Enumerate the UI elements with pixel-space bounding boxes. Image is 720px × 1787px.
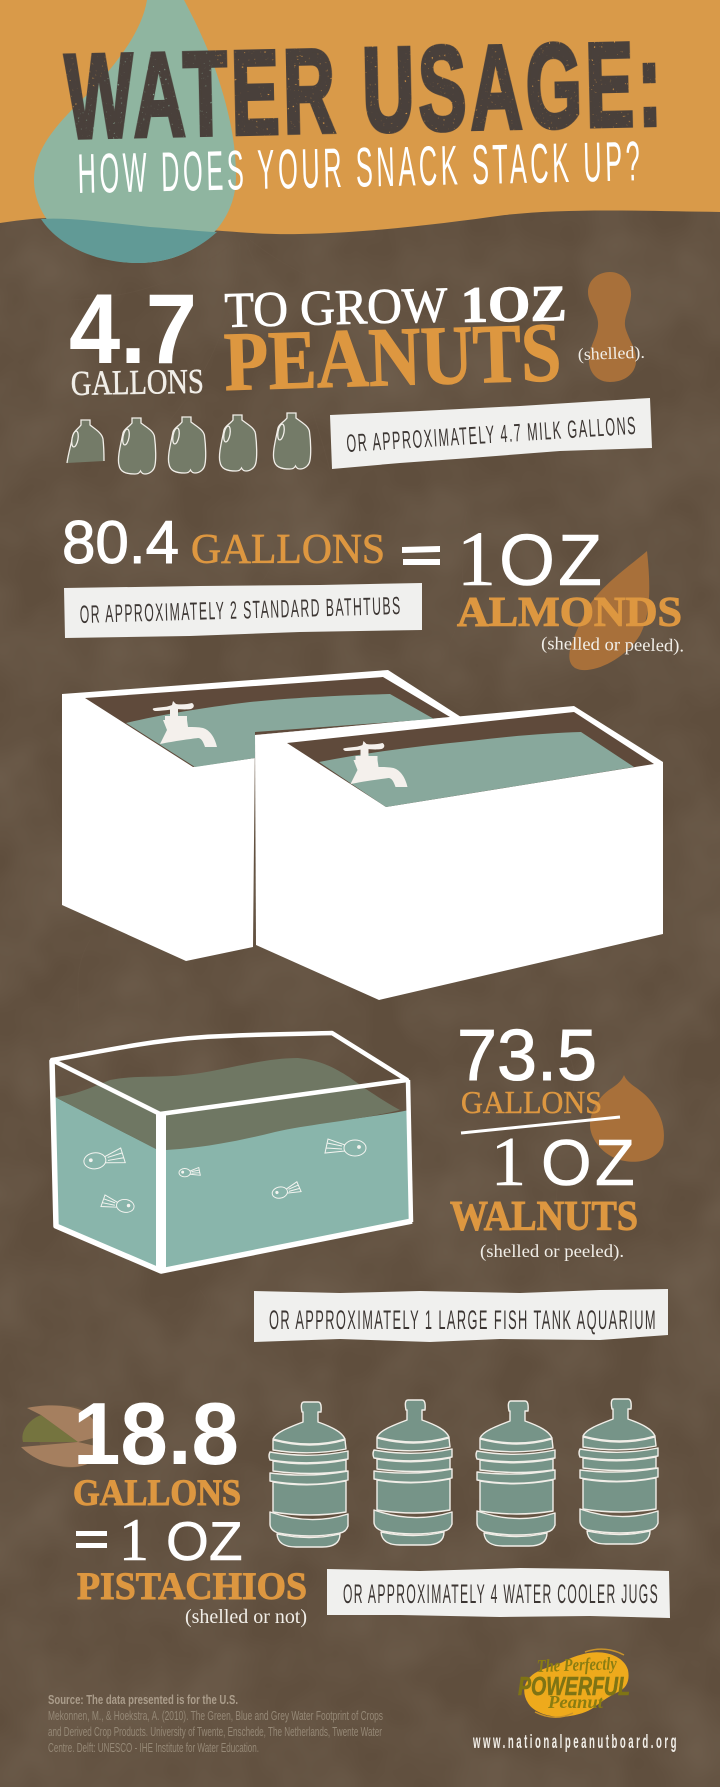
icon: almond [569, 551, 649, 670]
icon: peanut [588, 272, 636, 382]
icon: fish [83, 1148, 126, 1170]
logo: the perfectly powerful peanut: Peanut [547, 1692, 604, 1712]
icon: fish [179, 1167, 200, 1177]
1 oz: 1OZ [460, 276, 567, 334]
panel: pistachios [21, 1384, 670, 1628]
pistachios heading: PISTACHIOS [77, 1565, 307, 1608]
panel: walnuts [52, 1016, 668, 1342]
1 oz: 1 [491, 1124, 526, 1201]
icon: fish [271, 1181, 302, 1200]
icon: fish [325, 1139, 366, 1156]
shelled note: (shelled or peeled). [480, 1241, 624, 1262]
1 oz: 1 [119, 1507, 149, 1573]
source text: Centre. Delft: UNESCO - IHE Institute for Water Education. [48, 1740, 259, 1755]
to grow: TO GROW [224, 276, 449, 338]
water jug [579, 1399, 658, 1544]
1 oz: O [541, 1126, 592, 1199]
callout: aquarium [254, 1289, 668, 1342]
icon: milk jugs [67, 413, 311, 474]
callout: water cooler jugs [327, 1568, 670, 1618]
icon: faucet [343, 741, 408, 787]
source text: Source: The data presented is for the U.S. [48, 1692, 238, 1707]
water jug [476, 1401, 555, 1546]
icon: fish [101, 1195, 135, 1213]
panel: almonds [62, 509, 684, 1000]
shelled note: (shelled or peeled). [541, 633, 684, 656]
bathtub front [255, 706, 663, 1000]
1 oz: O [166, 1510, 209, 1572]
big number 73.5: 73.5 [457, 1016, 597, 1096]
source text [48, 1692, 383, 1755]
icon: walnut [590, 1075, 664, 1162]
icon: pistachio [21, 1405, 101, 1468]
callout: bathtubs [64, 583, 422, 638]
header band [0, 0, 720, 234]
fraction line [461, 1117, 620, 1133]
water jug [269, 1402, 348, 1547]
big number 80.4: 80.4 [62, 509, 179, 576]
water jug [373, 1400, 452, 1545]
shelled note: (shelled). [577, 343, 645, 364]
icon: faucet [153, 701, 217, 747]
milk jug [118, 418, 156, 474]
logo: the perfectly powerful peanut: The Perfectly [536, 1653, 618, 1676]
panel: peanuts [67, 272, 652, 474]
1 oz: 1 [457, 515, 496, 602]
1 oz: Z [595, 1126, 635, 1199]
1 oz: Z [558, 521, 602, 601]
big number 18.8: 18.8 [73, 1384, 239, 1483]
milk jug partial [67, 420, 104, 463]
gallons label: GALLONS [73, 1473, 241, 1514]
1 oz: Z [209, 1510, 243, 1572]
milk jug [168, 417, 206, 473]
source text: Mekonnen, M., & Hoekstra, A. (2010). The Green, Blue and Grey Water Footprint of Crops [48, 1708, 383, 1723]
equals sign [76, 1531, 107, 1548]
icon: water drop [34, 0, 236, 263]
fish tank [52, 1033, 412, 1271]
big number 4.7: 4.7 [69, 273, 197, 384]
milk jug [219, 415, 257, 471]
equals sign [402, 546, 440, 565]
walnuts heading: WALNUTS [450, 1194, 638, 1240]
shelled note: (shelled or not) [185, 1606, 307, 1628]
gallons label: GALLONS [461, 1084, 602, 1120]
gallons label: GALLONS [70, 362, 204, 403]
source text: and Derived Crop Products. University of Twente, Enschede, The Netherlands, Twente Water [48, 1724, 382, 1739]
callout: milk gallons [330, 398, 652, 469]
milk jug [273, 413, 311, 469]
1 oz: O [499, 521, 555, 601]
peanuts heading: PEANUTS [223, 306, 562, 409]
icon: water cooler jugs [269, 1399, 658, 1547]
gallons label: GALLONS [191, 527, 385, 573]
bathtub back [62, 670, 461, 961]
logo: the perfectly powerful peanut [518, 1649, 630, 1717]
almonds heading: ALMONDS [457, 590, 682, 636]
logo: the perfectly powerful peanut: POWERFUL [518, 1671, 630, 1701]
